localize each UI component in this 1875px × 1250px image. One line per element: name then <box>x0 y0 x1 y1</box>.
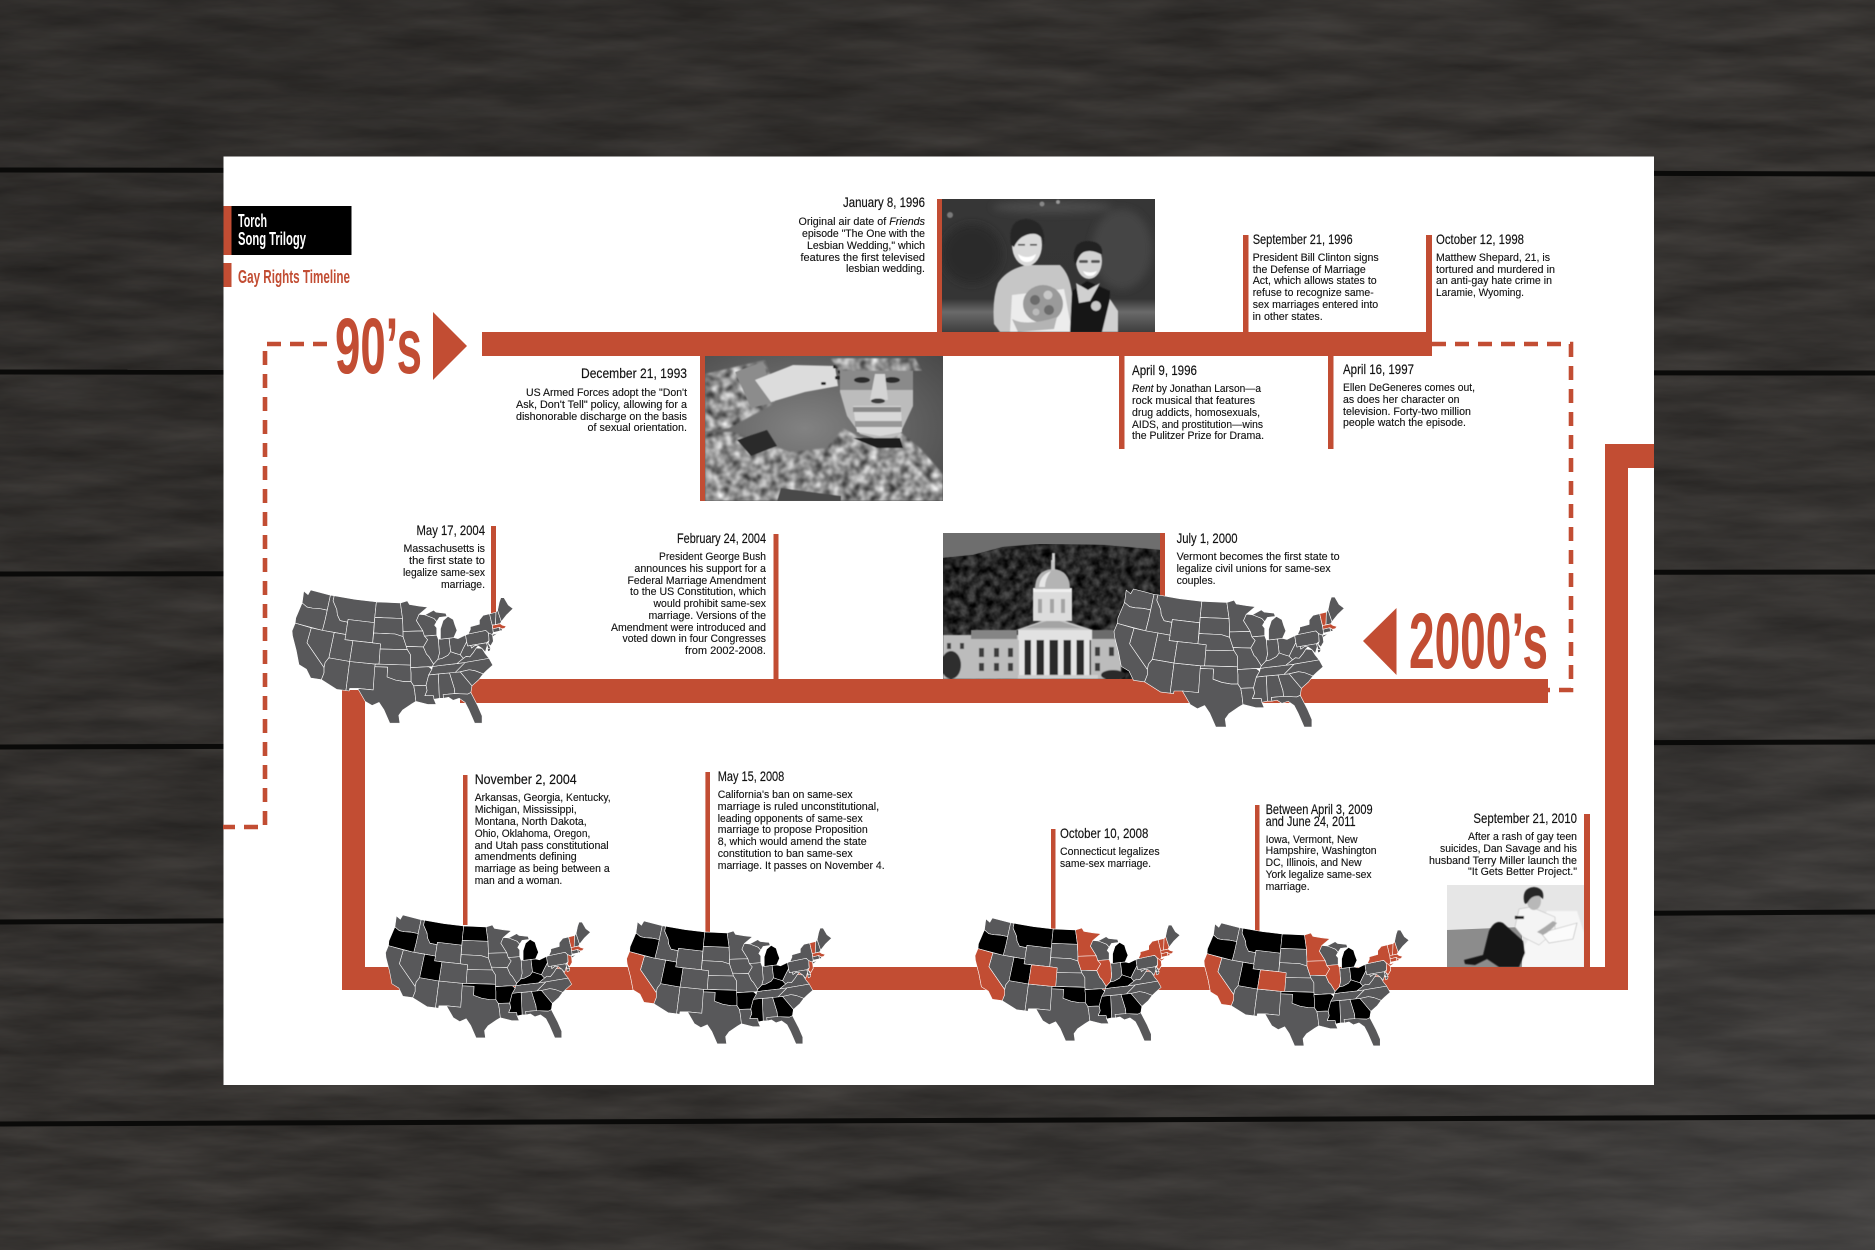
description: President Bill Clinton signs <box>1253 252 1379 264</box>
map: May 2004, Massachusetts highlighted <box>292 590 513 723</box>
date: October 10, 2008 <box>1060 825 1149 841</box>
description: husband Terry Miller launch the <box>1429 855 1577 867</box>
event: April 9, 1996 <box>1119 356 1264 449</box>
description: 8, which would amend the state <box>718 836 867 848</box>
event: February 24, 2004 <box>611 530 778 679</box>
description: people watch the episode. <box>1343 417 1466 429</box>
description: President George Bush <box>659 551 766 563</box>
date: October 12, 1998 <box>1436 231 1524 247</box>
date: and June 24, 2011 <box>1266 813 1356 829</box>
description: California's ban on same-sex <box>718 789 853 801</box>
description <box>718 789 885 872</box>
description: the first state to <box>409 555 485 567</box>
description: Massachusetts is <box>404 543 485 555</box>
date: January 8, 1996 <box>843 194 925 210</box>
description: marriage as being between a <box>475 863 610 875</box>
date: November 2, 2004 <box>475 771 577 787</box>
description: US Armed Forces adopt the "Don't <box>526 387 687 399</box>
description: to the US Constitution, which <box>630 586 766 598</box>
dashed connector: left <box>223 344 327 827</box>
description: same-sex marriage. <box>1060 858 1151 870</box>
description <box>798 216 926 275</box>
description: legalize same-sex <box>403 567 486 579</box>
description: "It Gets Better Project." <box>1468 866 1577 878</box>
description <box>1343 382 1475 429</box>
description: Laramie, Wyoming. <box>1436 287 1524 299</box>
photo: wedding <box>942 199 1155 332</box>
event: May 15, 2008 <box>705 768 885 932</box>
description: legalize civil unions for same-sex <box>1177 563 1331 575</box>
date <box>1266 801 1373 829</box>
title block: Torch <box>238 211 267 231</box>
description: Amendment were introduced and <box>611 622 766 634</box>
description: man and a woman. <box>475 875 562 887</box>
description <box>1132 383 1264 442</box>
description: marriage is ruled unconstitutional, <box>718 801 879 813</box>
date: December 21, 1993 <box>581 365 687 381</box>
description: rock musical that features <box>1132 395 1255 407</box>
paper sheet <box>224 156 1654 1085</box>
subtitle <box>224 263 350 287</box>
map: October 2008, Connecticut and others highlighted <box>975 918 1180 1041</box>
map: May 2008, California highlighted <box>627 921 832 1044</box>
description <box>475 792 611 887</box>
description <box>1177 551 1340 587</box>
dashed connector: right <box>1432 344 1571 690</box>
event: July 1, 2000 with capitol photo <box>941 530 1340 680</box>
map: 2009-2011, legalizing states highlighted <box>1204 923 1409 1046</box>
description: marriage. <box>441 579 485 591</box>
date: September 21, 1996 <box>1253 231 1353 247</box>
description: Act, which allows states to <box>1253 275 1377 287</box>
description: Iowa, Vermont, New <box>1266 834 1358 846</box>
description <box>1060 846 1160 870</box>
description: lesbian wedding. <box>846 263 925 275</box>
date: February 24, 2004 <box>677 530 766 546</box>
photo: teen with laptop <box>1447 885 1584 967</box>
description: of sexual orientation. <box>588 422 687 434</box>
date: May 15, 2008 <box>718 768 784 784</box>
description: Lesbian Wedding," which <box>807 240 925 252</box>
description: DC, Illinois, and New <box>1266 857 1362 869</box>
subtitle: Gay Rights Timeline <box>238 266 350 287</box>
map: July 2000, Vermont and Massachusetts highlighted <box>1114 589 1344 727</box>
event: April 16, 1997 <box>1328 356 1475 449</box>
description: Michigan, Mississippi, <box>475 804 577 816</box>
description: After a rash of gay teen <box>1468 831 1577 843</box>
description <box>1436 252 1555 299</box>
description: Connecticut legalizes <box>1060 846 1160 858</box>
heading: 90's with arrow: 90’s <box>335 301 422 390</box>
description: couples. <box>1177 575 1216 587</box>
photo: Vermont State House <box>943 533 1160 679</box>
event: September 21, 2010 with photo <box>1429 810 1590 967</box>
title block: Song Trilogy <box>238 229 306 249</box>
heading: 2000's with arrow <box>1363 596 1548 685</box>
description: Arkansas, Georgia, Kentucky, <box>475 792 611 804</box>
description: sex marriages entered into <box>1253 299 1378 311</box>
description: suicides, Dan Savage and his <box>1440 843 1577 855</box>
description: Hampshire, Washington <box>1266 845 1377 857</box>
description: features the first televised <box>800 252 925 264</box>
description <box>516 387 687 434</box>
heading: 2000's with arrow: 2000’s <box>1409 596 1548 685</box>
event: January 8, 1996 with wedding photo <box>798 194 1155 332</box>
date: Between April 3, 2009 <box>1266 801 1373 817</box>
date: July 1, 2000 <box>1177 530 1238 546</box>
event: December 21, 1993 with soldier photo <box>516 356 943 501</box>
description <box>611 551 767 657</box>
event: September 21, 1996 <box>1243 231 1379 332</box>
description: episode "The One with the <box>802 228 925 240</box>
description: marriage. Versions of the <box>648 610 766 622</box>
description: Federal Marriage Amendment <box>628 575 766 587</box>
description: Montana, North Dakota, <box>475 816 587 828</box>
description: refuse to recognize same- <box>1253 287 1374 299</box>
date: May 17, 2004 <box>416 522 485 538</box>
description: as does her character on <box>1343 394 1460 406</box>
description: constitution to ban same-sex <box>718 848 853 860</box>
description: amendments defining <box>475 851 577 863</box>
description: leading opponents of same-sex <box>718 813 863 825</box>
description: dishonorable discharge on the basis <box>516 411 687 423</box>
date: September 21, 2010 <box>1473 810 1577 826</box>
description: Vermont becomes the first state to <box>1177 551 1340 563</box>
description: and Utah pass constitutional <box>475 840 609 852</box>
description: would prohibit same-sex <box>653 598 767 610</box>
description <box>1253 252 1379 323</box>
description: tortured and murdered in <box>1436 264 1555 276</box>
description: drug addicts, homosexuals, <box>1132 407 1260 419</box>
date: April 16, 1997 <box>1343 361 1414 377</box>
date: April 9, 1996 <box>1132 362 1197 378</box>
event: October 10, 2008 <box>1051 825 1160 932</box>
description: Original air date of Friends <box>798 216 926 228</box>
photo: saluting soldier <box>705 356 943 501</box>
event: November 2, 2004 <box>463 771 611 925</box>
description: from 2002-2008. <box>685 645 766 657</box>
description: the Defense of Marriage <box>1253 264 1366 276</box>
map: November 2004, amendment states in black <box>386 915 590 1038</box>
description: the Pulitzer Prize for Drama. <box>1132 430 1264 442</box>
description: Ohio, Oklahoma, Oregon, <box>475 828 590 840</box>
description: an anti-gay hate crime in <box>1436 275 1552 287</box>
description <box>1429 831 1577 878</box>
description: Ask, Don't Tell" policy, allowing for a <box>516 399 687 411</box>
description: Ellen DeGeneres comes out, <box>1343 382 1475 394</box>
description: marriage. <box>1266 881 1310 893</box>
description: Matthew Shepard, 21, is <box>1436 252 1550 264</box>
description <box>1266 834 1377 893</box>
event: Between April 3, 2009 and June 24, 2011 <box>1255 801 1377 935</box>
description: television. Forty-two million <box>1343 406 1471 418</box>
event: October 12, 1998 <box>1426 231 1555 332</box>
title block <box>224 206 352 255</box>
description: in other states. <box>1253 311 1323 323</box>
description: Rent by Jonathan Larson—a <box>1132 383 1261 395</box>
description: announces his support for a <box>634 563 766 575</box>
description: marriage to propose Proposition <box>718 824 868 836</box>
description: AIDS, and prostitution—wins <box>1132 419 1263 431</box>
description: marriage. It passes on November 4. <box>718 860 885 872</box>
timeline track: connecting bars <box>342 332 1654 990</box>
description: York legalize same-sex <box>1266 869 1372 881</box>
description <box>403 543 486 591</box>
event: May 17, 2004 <box>403 522 496 618</box>
description: voted down in four Congresses <box>622 633 766 645</box>
